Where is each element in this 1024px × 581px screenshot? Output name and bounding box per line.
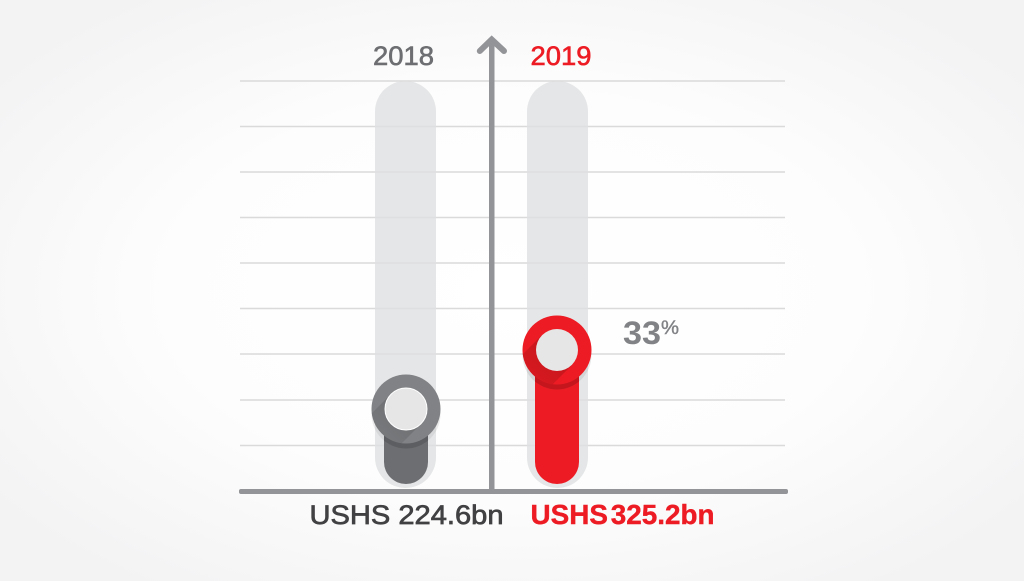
growth label: 33% bbox=[623, 315, 679, 351]
track: 2019 bbox=[527, 81, 588, 488]
infographic: revenue comparison 2018 vs 2019 bbox=[239, 36, 788, 525]
track: 2018 bbox=[375, 81, 436, 488]
year label: 2019: 2019 bbox=[530, 41, 592, 71]
marker: 2018 bbox=[372, 374, 440, 448]
marker: 2019 bbox=[522, 316, 592, 390]
axes bbox=[239, 40, 788, 494]
arrowhead bbox=[480, 40, 504, 51]
year label: 2018: 2018 bbox=[373, 41, 434, 71]
growth label: 33%: 33 bbox=[623, 315, 661, 351]
bar: 2018 bbox=[364, 81, 440, 488]
bar: 2019 bbox=[515, 81, 592, 488]
value label: 2018: USHS 224.6bn bbox=[310, 500, 504, 530]
value label: 2019: USHS 325.2bn bbox=[530, 499, 714, 530]
growth label: 33%: % bbox=[661, 318, 679, 339]
fill: 2018 bbox=[384, 400, 428, 484]
fill: 2019 bbox=[535, 360, 579, 484]
